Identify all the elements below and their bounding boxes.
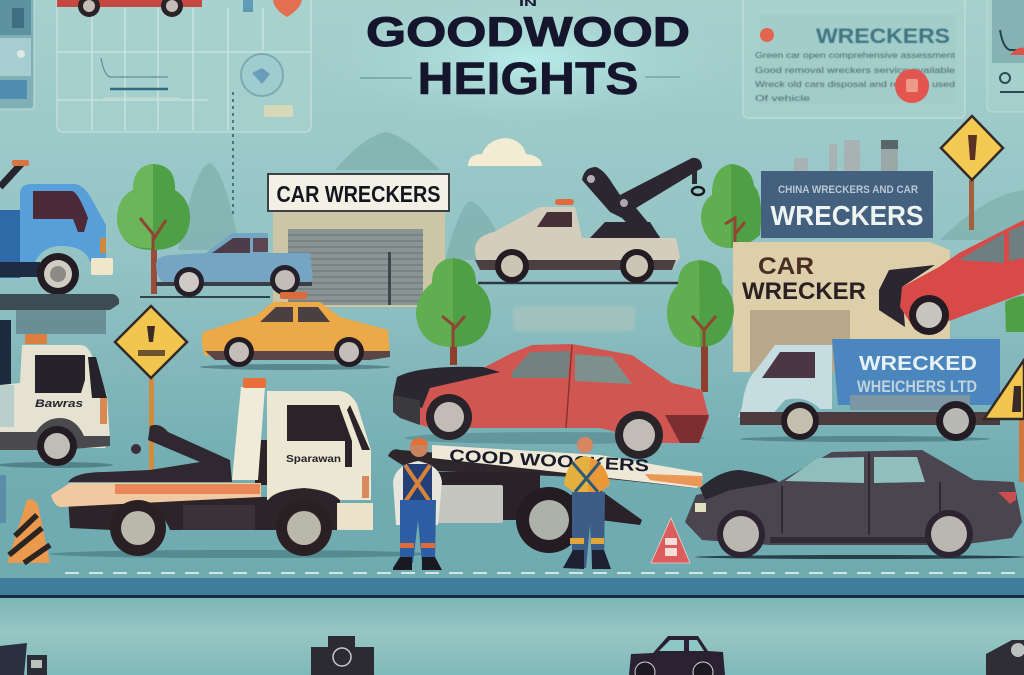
title: GOODWOOD — [366, 8, 690, 55]
warning triangle — [651, 518, 690, 563]
vehicle: white cab truck left — [0, 320, 113, 468]
vehicle: wrecked red hatchback — [879, 220, 1024, 335]
vehicle: blue box truck — [738, 339, 1000, 442]
panel: top-left map — [57, 0, 311, 132]
cab — [267, 391, 371, 500]
sign: wreckers: WRECKERS — [770, 200, 924, 231]
vehicle: flatbed with coop wreckers lettering: COOD WOOCKERS — [449, 446, 650, 475]
vehicle: flatbed with coop wreckers lettering — [388, 445, 702, 553]
worker fragment — [0, 475, 6, 523]
vehicle: white pickup with crane — [475, 158, 704, 283]
tree — [117, 164, 190, 294]
panel text: Good removal wreckers service available — [755, 65, 955, 75]
icon: bottom camera device — [311, 636, 374, 675]
worker: front facing — [393, 438, 442, 570]
cloud — [468, 138, 542, 166]
panel text: Green car open comprehensive assessment — [755, 50, 956, 60]
sign: warning top right — [941, 116, 1003, 230]
red icon — [760, 28, 774, 42]
icon: flatbed sketch — [101, 58, 180, 98]
building: car wreckers garage — [268, 174, 449, 307]
tree — [701, 164, 761, 250]
icon: map pin — [273, 0, 302, 17]
panel: top-left sliver — [0, 0, 34, 109]
sign: wreckers — [761, 171, 933, 238]
icon: bottom right car — [986, 640, 1024, 675]
vehicle: blue pickup — [140, 233, 313, 297]
sign: wreckers: CHINA WRECKERS AND CAR — [778, 184, 918, 196]
crane — [582, 158, 704, 237]
vehicle: flatbed tow truck — [50, 378, 430, 558]
vehicle: blue box truck: WHEICHERS LTD — [857, 377, 977, 396]
building: car wrecker — [733, 242, 950, 372]
road edge — [0, 578, 1024, 598]
vehicle: red sedan — [393, 344, 709, 459]
vehicle: flatbed tow truck: Sparawan — [286, 454, 341, 465]
green foliage at right edge — [1005, 296, 1024, 332]
lower band — [0, 598, 1024, 675]
tree — [667, 260, 734, 392]
icon: red badge — [895, 69, 929, 103]
sign: warning right edge — [984, 360, 1024, 482]
panel: top-right sliver — [987, 0, 1024, 112]
faded wall poster — [513, 307, 635, 331]
vehicle: dark sedan — [685, 450, 1024, 559]
panel text: Of vehicle — [755, 93, 810, 103]
building sign: CAR — [758, 253, 814, 280]
building sign: WRECKER — [742, 278, 866, 305]
label chip — [264, 105, 293, 117]
sign — [268, 174, 449, 211]
title — [366, 0, 690, 104]
vehicle: white cab truck left: Bawras — [35, 398, 83, 410]
tow arm — [68, 425, 232, 482]
road markings — [65, 572, 1024, 574]
icon: red car on map — [57, 0, 202, 17]
icon: small map marker — [243, 0, 253, 12]
sign: warning left — [115, 306, 187, 471]
mountains — [178, 132, 1024, 260]
title glow — [308, 0, 748, 130]
flat bed — [51, 483, 261, 507]
cone — [7, 499, 50, 563]
vehicle: blue tow truck — [0, 160, 119, 334]
icon: bottom small car — [629, 636, 725, 675]
panel text: Wreck old cars disposal and recycled used — [755, 79, 955, 89]
truck lettering: WRECKED — [859, 353, 977, 375]
title: HEIGHTS — [418, 53, 638, 104]
chimneys — [794, 140, 898, 172]
icon: magnifier — [241, 54, 283, 96]
sign: CAR WRECKERS — [276, 181, 440, 207]
icon: bottom left truck — [0, 643, 47, 675]
vehicle: yellow taxi — [200, 292, 390, 370]
panel: top-right text panel — [743, 0, 965, 118]
chassis — [68, 497, 340, 530]
dashed connector — [232, 92, 234, 218]
panel heading: WRECKERS — [816, 25, 950, 48]
panel text — [755, 50, 956, 103]
building sign — [742, 253, 866, 305]
beacon mast — [255, 440, 268, 485]
worker: rear facing — [563, 437, 611, 569]
tree — [416, 258, 491, 365]
